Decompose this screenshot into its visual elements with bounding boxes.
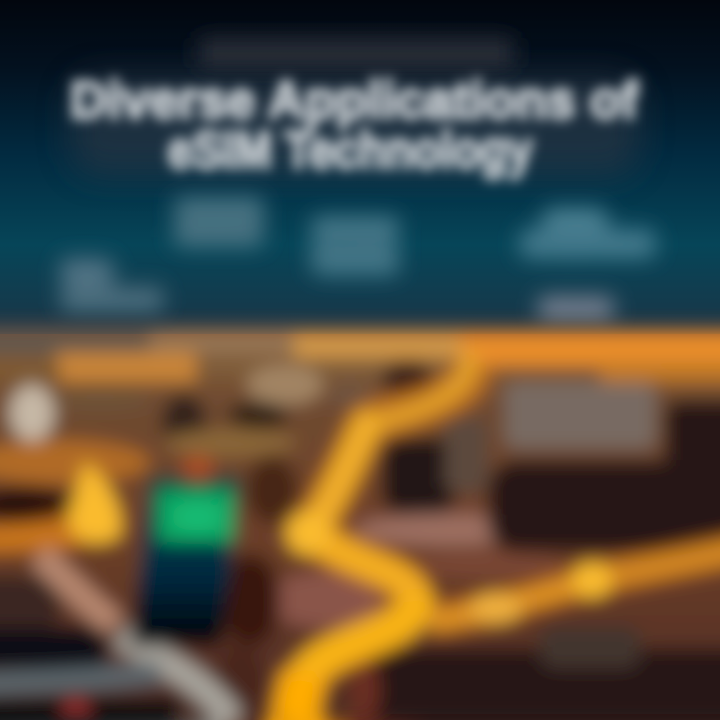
background: night sky gradient	[0, 0, 720, 340]
road glow halo	[0, 363, 720, 720]
horizon glow	[0, 330, 720, 382]
label: first feature	[172, 196, 264, 247]
label: fourth feature	[60, 258, 164, 313]
label: second feature: Roaming	[310, 250, 400, 273]
phone screen: green panel	[158, 490, 234, 542]
label: third feature	[518, 208, 656, 260]
red light accent	[62, 698, 90, 718]
glowing road network	[0, 360, 720, 720]
feature labels floating above the city	[60, 196, 656, 322]
phone body	[130, 476, 240, 646]
label: second feature	[310, 214, 400, 276]
title: Diverse Applications of	[70, 71, 638, 130]
main yellow road lower	[294, 545, 720, 720]
label: fifth feature: More	[540, 295, 610, 317]
label: second feature: Global	[310, 214, 400, 237]
city blocks: dark districts and grey towers	[0, 382, 720, 720]
icon: smartphone with green screen	[130, 455, 240, 646]
city ground underlay	[0, 334, 720, 720]
label: third feature: Smart	[540, 210, 610, 233]
label: fourth feature: Travel	[65, 263, 115, 285]
label: fourth feature: Solutions	[62, 291, 162, 313]
label: fifth feature	[538, 295, 614, 322]
label: first feature: Connected	[172, 196, 264, 219]
main yellow road upper	[312, 360, 469, 595]
city scene	[0, 328, 720, 720]
city blocks: mottled texture	[0, 360, 565, 714]
city ground	[0, 328, 720, 720]
title: eSIM Technology	[168, 121, 533, 180]
title glow	[70, 75, 640, 175]
road glow spots	[68, 462, 612, 623]
subtitle	[198, 38, 514, 68]
phone top notch	[182, 455, 214, 481]
pale grey streets	[0, 555, 232, 720]
title	[70, 71, 638, 180]
label: first feature: Devices	[172, 224, 264, 247]
bottom edge colours	[0, 695, 720, 720]
label: third feature: Transportation	[518, 237, 654, 260]
